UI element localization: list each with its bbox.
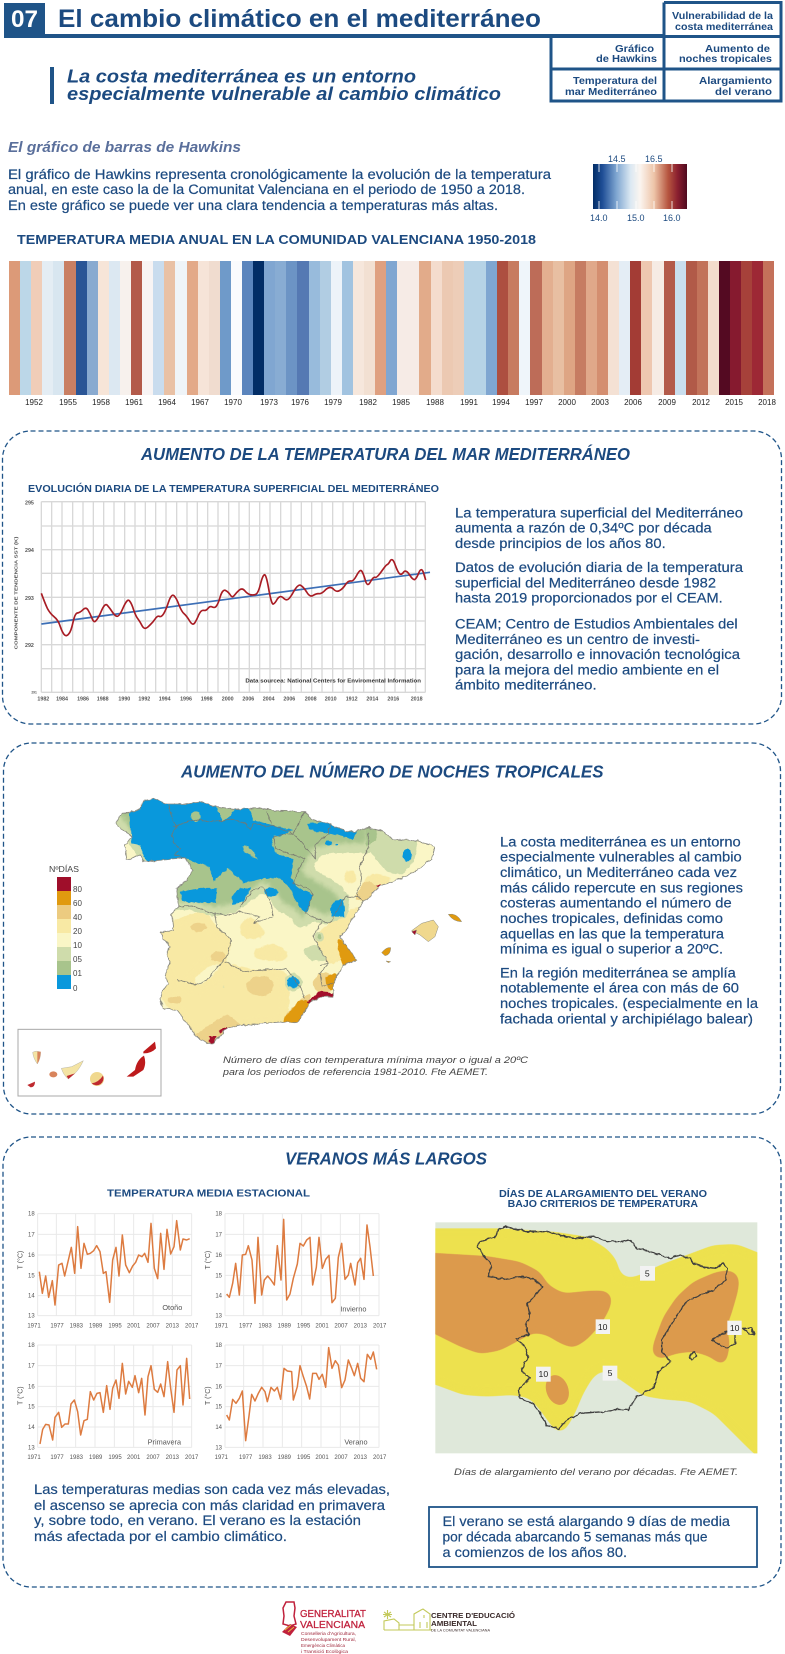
stripe year labels: 1979 [324,398,342,407]
map of Spain: tropical nights [18,780,467,1096]
callout box: El verano se está alargando 9 días de media [442,1513,730,1529]
chart: verano: 1971 [215,1455,229,1461]
panel text: costeras aumentando el número de [500,896,732,911]
panel heading: VERANOS MÁS LARGOS [285,1148,487,1168]
chart: primavera: 2013 [166,1455,180,1461]
value labels [536,1266,742,1382]
stripe year labels: 2003 [591,398,609,407]
chart: primavera: 17 [28,1364,35,1370]
chart: otono: 1977 [50,1324,64,1330]
left summary text [34,1481,390,1544]
hawkins intro: El gráfico de barras de Hawkins [8,140,241,156]
chart: otono: 2017 [185,1324,199,1330]
balearic islands [382,914,462,963]
left summary text: y, sobre todo, en verano. El verano es la estación [34,1512,361,1528]
stripe year labels: 1991 [460,398,478,407]
subtitle: La costa mediterránea es un entorno [67,66,416,86]
nav: temperatura del mar: Temperatura del [573,75,657,87]
seasonal charts heading: TEMPERATURA MEDIA ESTACIONAL [107,1188,311,1200]
sea temperature line chart: 1986 [77,697,89,703]
chart: verano: 2017 [373,1455,387,1461]
map caption [222,1055,528,1078]
chart: invierno: T (°C) [204,1251,212,1269]
chart: otono: 1971 [27,1324,41,1330]
stripe year labels: 1967 [191,398,209,407]
panel text: Mediterráneo es un centro de investi- [455,632,700,647]
colour scale legend: 14.5 [608,154,626,164]
stripe year labels [25,398,776,407]
chart: otono: 18 [28,1212,35,1218]
panel text: La temperatura superficial del Mediterráneo [455,506,743,521]
chart: verano: 17 [215,1364,223,1370]
legend: number of days: 40 [73,913,82,922]
map caption: Número de días con temperatura mínima mayor o igual a 20ºC [223,1055,528,1066]
panel text: La costa mediterránea es un entorno [500,835,741,850]
sea temperature line chart: 2016 [387,697,399,703]
chart: verano: 18 [215,1343,223,1349]
colour scale legend: 16.5 [645,154,663,164]
chart: verano: T (°C) [204,1386,212,1405]
chart: verano: 1977 [239,1455,253,1461]
value labels: 5 [608,1368,613,1378]
stripe year labels: 1985 [392,398,410,407]
colour scale legend: 14.0 [590,213,608,223]
sea temperature line chart: 2004 [263,697,275,703]
header [4,3,664,38]
panel text: noches tropicales, definidas como [500,911,723,926]
sea temperature line chart: 2000 [222,697,234,703]
stripe year labels: 1970 [224,398,242,407]
chart: otono: 14 [28,1294,35,1300]
map caption: para los periodos de referencia 1981-2010. Fte AEMET. [222,1067,488,1078]
chart: primavera: 1989 [89,1455,103,1461]
chart: invierno [204,1212,387,1330]
callout box [429,1507,757,1567]
chart: invierno: 14 [215,1294,223,1300]
chart: invierno: 2001 [315,1324,329,1330]
chart: invierno: 1983 [258,1324,272,1330]
stripe year labels: 2006 [624,398,642,407]
chart: primavera: 1983 [70,1455,84,1461]
panel text: ámbito mediterráneo. [455,677,597,692]
chart: invierno: 15 [215,1273,223,1279]
legend: number of days [49,865,82,993]
chart: verano: 2013 [354,1455,368,1461]
left summary text: el ascenso se aprecia con más claridad en primavera [34,1497,385,1513]
chart: otono: 1989 [89,1324,103,1330]
nav: grafico de hawkins: de Hawkins [596,53,657,65]
stripe year labels: 2012 [692,398,710,407]
chart: primavera: 2001 [127,1455,141,1461]
legend: number of days: 05 [73,955,82,964]
chart: primavera [16,1343,199,1461]
sea temperature line chart: COMPONENTE DE TENDENCIA SST (K) [13,536,18,649]
chart: otono: 2007 [146,1324,160,1330]
chart: invierno: 1989 [278,1324,292,1330]
canary islands inset [18,1029,161,1096]
chart: primavera: 2007 [146,1455,160,1461]
subtitle: especialmente vulnerable al cambio climático [67,83,501,104]
chart: otono: 17 [28,1232,35,1238]
chart: primavera: 13 [28,1445,35,1451]
nav: vulnerabilidad: Vulnerabilidad de la [672,11,773,22]
left summary text: Las temperaturas medias son cada vez más elevadas, [34,1481,390,1497]
panel text: climático, un Mediterráneo cada vez [500,865,737,880]
panel heading: AUMENTO DE LA TEMPERATURA DEL MAR MEDITERRÁNEO [140,443,630,464]
hawkins intro [8,140,552,213]
sea temperature line chart: 292 [25,643,34,649]
sea temperature line chart: 1988 [97,697,109,703]
panel text: mínima es igual o superior a 20ºC. [500,941,723,956]
chart: invierno: 1995 [297,1324,311,1330]
colour scale legend: 16.0 [663,213,681,223]
logo: generalitat valenciana [282,1602,366,1654]
stripe year labels: 1952 [25,398,43,407]
sea temperature line chart: 2010 [325,697,337,703]
panel text: desde principios de los años 80. [455,536,666,551]
stripe year labels: 2009 [658,398,676,407]
panel text: En la región mediterránea se amplía [500,965,736,980]
callout box: a comienzos de los años 80. [442,1544,627,1560]
chart: invierno: 1971 [215,1324,229,1330]
stripe year labels: 1958 [92,398,110,407]
chart: invierno: 18 [215,1212,223,1218]
logo: centre d'educacio ambiental: CENTRE D'EDUCACIÓ [431,1611,515,1620]
stripe year labels: 1955 [59,398,77,407]
legend: number of days: 0 [73,984,78,993]
sea temperature line chart: 2006 [242,697,254,703]
chart: verano: 2001 [315,1455,329,1461]
shield icon [282,1602,297,1636]
panel text: notablemente el área con más de 60 [500,981,739,996]
chart: verano [204,1343,387,1461]
chart: otono: Otoño [162,1303,182,1312]
stripe year labels: 2000 [558,398,576,407]
panel text: fachada oriental y archipiélago balear) [500,1011,753,1026]
sea temperature line chart: 294 [25,548,34,554]
chart heading: EVOLUCIÓN DIARIA DE LA TEMPERATURA SUPERFICIAL DEL MEDITERRÁNEO [28,482,439,495]
logo: generalitat valenciana: GENERALITAT [300,1609,366,1620]
chart: invierno: 2017 [373,1324,387,1330]
chart: primavera: 18 [28,1343,35,1349]
nav: alargamiento del verano [699,75,772,98]
chart: primavera: 14 [28,1425,35,1431]
stripe year labels: 1964 [158,398,176,407]
nav: temperatura del mar: mar Mediterráneo [565,86,657,98]
panel text: aumenta a razón de 0,34ºC por década [455,521,712,536]
logo: centre d'educacio ambiental [383,1609,515,1632]
chart: primavera: 1995 [108,1455,122,1461]
logo: generalitat valenciana: Conselleria d'Agricultura, [301,1631,356,1637]
panel text: Datos de evolución diaria de la temperatura [455,560,744,575]
stripe year labels: 1976 [291,398,309,407]
chart: otono: 15 [28,1273,35,1279]
sea temperature line chart: 1984 [56,697,68,703]
building and palm icon [383,1609,432,1630]
sea temperature line chart: 1912 [346,697,358,703]
chart: otono: 2001 [127,1324,141,1330]
stripe year labels: 1961 [125,398,143,407]
colour scale legend [590,154,687,223]
stripe year labels: 1973 [260,398,278,407]
chart: primavera: 16 [28,1384,35,1390]
panel text: CEAM; Centro de Estudios Ambientales del [455,617,738,632]
summer lengthening heading [499,1187,707,1210]
chart: otono [16,1212,199,1330]
sea temperature line chart: 2014 [366,697,378,703]
chart: primavera: T (°C) [16,1386,24,1405]
chart: primavera: Primavera [148,1437,182,1446]
sea temperature line chart: 1982 [37,697,49,703]
sea temperature line chart: 1994 [159,697,171,703]
nav: alargamiento del verano: del verano [715,86,772,98]
colour scale legend: 15.0 [627,213,645,223]
panel: veranos mas largos [3,1137,781,1587]
section number box [4,3,45,38]
navigation boxes [551,2,781,101]
chart: otono: 13 [28,1314,35,1320]
logo: centre d'educacio ambiental: DE LA COMUNITAT VALENCIANA [431,1628,491,1632]
legend: number of days: 10 [73,941,82,950]
stripe year labels: 1994 [492,398,510,407]
chart: otono: 16 [28,1253,35,1259]
chart: otono: 1983 [70,1324,84,1330]
nav: grafico de hawkins: Gráfico [615,43,654,55]
left summary text: más afectada por el cambio climático. [34,1528,287,1544]
hawkins intro: El gráfico de Hawkins representa cronológicamente la evolución de la temperatura [8,167,552,182]
sea temperature line chart: 2008 [305,697,317,703]
sea temperature line chart: Data sourcea: National Centers for Enviromental Information [245,678,421,684]
panel text: noches tropicales. (especialmente en la [500,996,759,1011]
heading: warming stripes: TEMPERATURA MEDIA ANUAL EN LA COMUNIDAD VALENCIANA 1950-2018 [17,232,536,247]
chart: invierno: 17 [215,1232,223,1238]
chart: otono: 1995 [108,1324,122,1330]
nav: grafico de hawkins [596,43,657,65]
panel heading: AUMENTO DEL NÚMERO DE NOCHES TROPICALES [180,761,604,782]
logo: centre d'educacio ambiental: AMBIENTAL [431,1619,477,1628]
nav: noches tropicales: Aumento de [705,43,770,55]
title: El cambio climático en el mediterráneo [58,5,541,33]
chart: verano: 2007 [334,1455,348,1461]
panel text [500,835,759,1026]
chart: invierno: 1977 [239,1324,253,1330]
panel text: superficial del Mediterráneo desde 1982 [455,575,716,590]
subtitle [50,66,501,104]
sea temperature line chart: 2006 [283,697,295,703]
sea temperature line chart [13,500,430,703]
sea temperature line chart: 1996 [180,697,192,703]
panel text: más cálido repercute en sus regiones [500,880,743,895]
sea temperature line chart: 1992 [138,697,150,703]
panel text: gación, desarrollo e innovación tecnológica [455,647,741,662]
panel text: hasta 2019 proporcionados por el CEAM. [455,591,723,606]
chart: otono: T (°C) [16,1251,24,1269]
stripe year labels: 2015 [725,398,743,407]
chart: primavera: 1971 [27,1455,41,1461]
value labels: 5 [645,1269,650,1279]
legend: number of days: NºDÍAS [49,865,79,874]
nav: alargamiento del verano: Alargamiento [699,75,772,87]
hawkins intro: anual, en este caso la de la Comunitat Valenciana en el periodo de 1950 a 2018. [8,182,525,197]
sea temperature line chart: 1998 [201,697,213,703]
sea temperature line chart: 2018 [411,697,423,703]
map caption: Días de alargamiento del verano por décadas. Fte AEMET. [454,1467,738,1478]
chart: verano: 16 [215,1384,223,1390]
panel text: aquellas en las que la temperatura [500,926,725,941]
hawkins intro: En este gráfico se puede ver una clara tendencia a temperaturas más altas. [8,198,498,213]
chart: invierno: Invierno [340,1305,366,1314]
stripe year labels: 1988 [426,398,444,407]
legend: number of days: 20 [73,927,82,936]
chart: verano: 1995 [297,1455,311,1461]
nav: vulnerabilidad [672,11,773,33]
stripe year labels: 1982 [359,398,377,407]
chart: verano: 15 [215,1405,223,1411]
map: summer lengthening [435,1222,758,1454]
stripe year labels: 2018 [758,398,776,407]
sea temperature line chart: 293 [25,596,34,602]
callout box: por década abarcando 5 semanas más que [442,1529,708,1545]
panel text: para la mejora del medio ambiente en el [455,662,719,677]
chart: invierno: 13 [215,1314,223,1320]
chart: verano: 13 [215,1445,223,1451]
panel: temperatura del mar [2,431,782,724]
panel text [455,506,744,692]
sea temperature line chart: 1990 [118,697,130,703]
chart: otono: 2013 [166,1324,180,1330]
chart: invierno: 2013 [354,1324,368,1330]
sea temperature line chart: 295 [25,500,34,506]
nav: vulnerabilidad: costa mediterránea [675,22,773,33]
legend: number of days: 80 [73,885,82,894]
summer lengthening heading: DÍAS DE ALARGAMIENTO DEL VERANO [499,1187,707,1200]
summer lengthening heading: BAJO CRITERIOS DE TEMPERATURA [508,1199,698,1210]
chart: verano: Verano [344,1437,368,1446]
warming stripes chart 1950-2018 [9,261,774,395]
section number box: 07 [11,6,38,33]
header rule [4,34,664,38]
stripe year labels: 1997 [525,398,543,407]
nav: noches tropicales: noches tropicales [679,53,772,65]
logo: generalitat valenciana: Desenvolupament Rural, [301,1637,356,1643]
chart: verano: 1989 [278,1455,292,1461]
value labels: 10 [598,1322,608,1332]
chart: verano: 14 [215,1425,223,1431]
chart: primavera: 2017 [185,1455,199,1461]
chart: primavera: 1977 [50,1455,64,1461]
legend: number of days: 60 [73,899,82,908]
logo: generalitat valenciana: Emergència Climàtica [301,1643,345,1649]
panel: noches tropicales [4,743,780,1114]
nav: noches tropicales [679,43,772,65]
value labels: 10 [539,1369,548,1379]
sea temperature line chart: 291 [31,691,37,695]
chart: invierno: 16 [215,1253,223,1259]
chart: primavera: 15 [28,1405,35,1411]
legend: number of days: 01 [73,969,82,978]
chart: invierno: 2007 [334,1324,348,1330]
panel text: especialmente vulnerables al cambio [500,850,742,865]
seasonal line charts [16,1212,387,1461]
nav: temperatura del mar [565,75,657,98]
logo: generalitat valenciana: VALENCIANA [300,1620,365,1631]
value labels: 10 [730,1323,740,1333]
chart: verano: 1983 [258,1455,272,1461]
